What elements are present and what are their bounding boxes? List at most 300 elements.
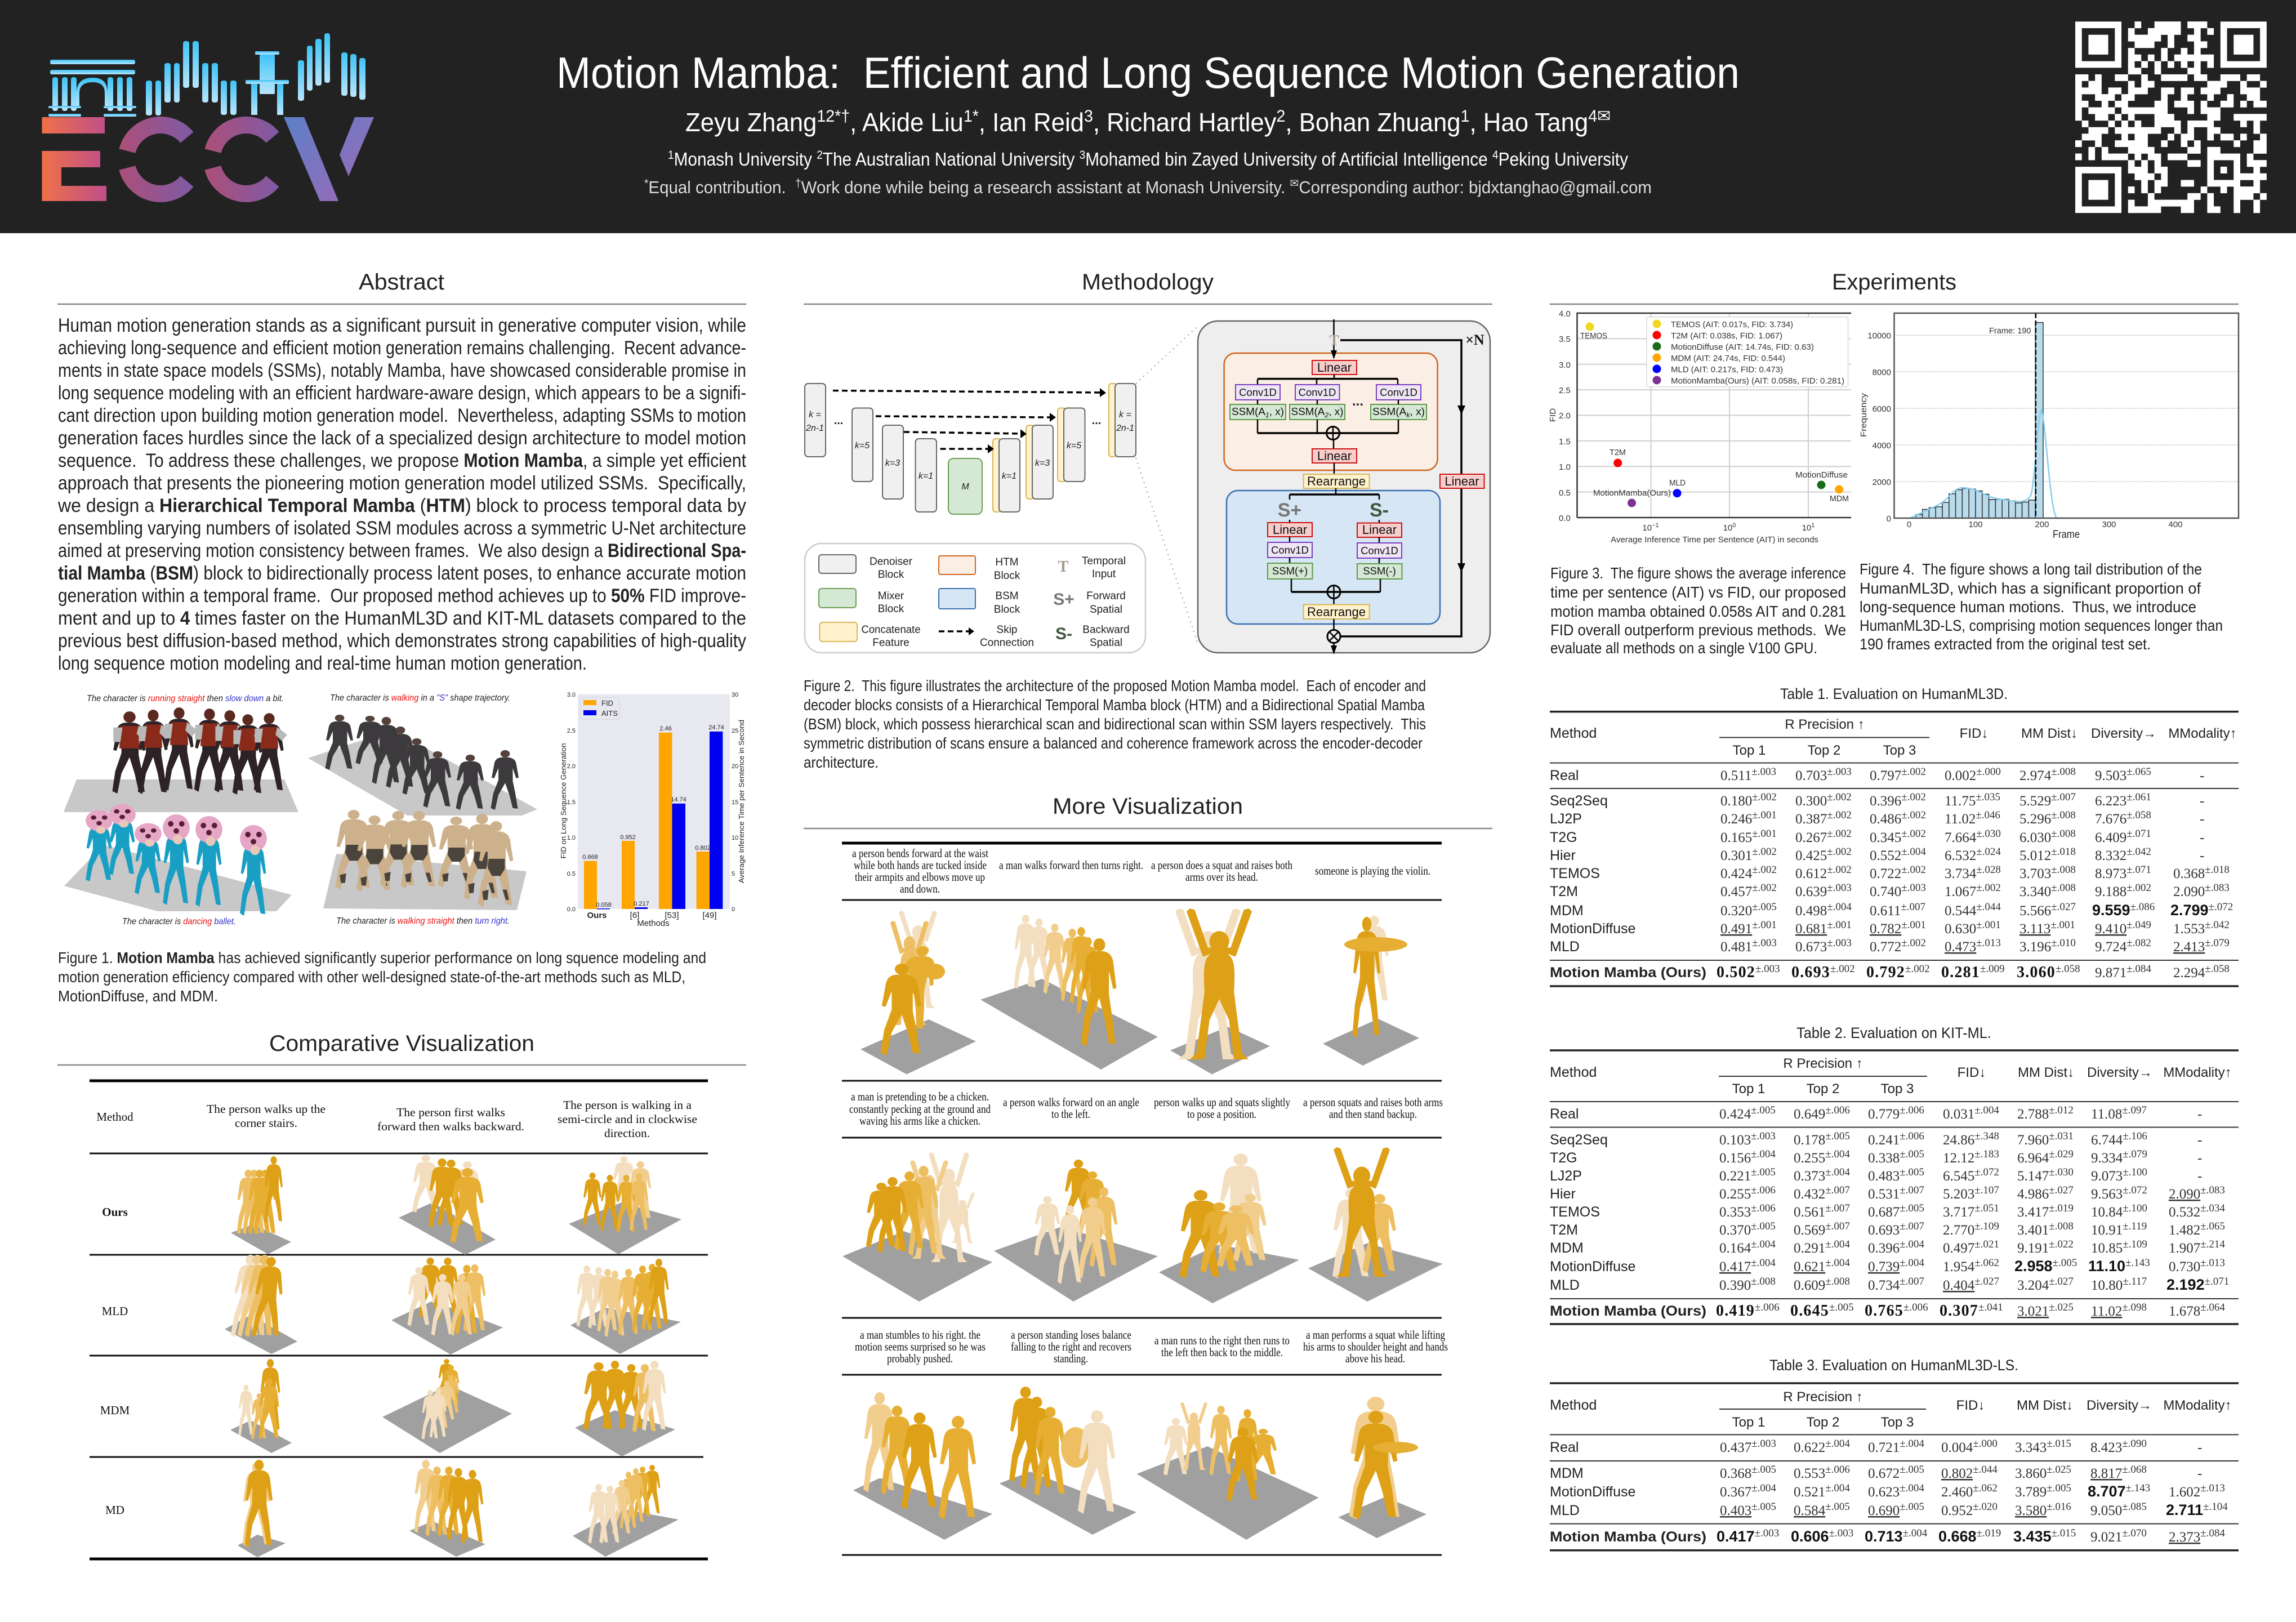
row: MDM: 0.611 <box>1870 903 1901 919</box>
row: Hier: 9.563 <box>2091 1187 2123 1202</box>
row: MLD: ±.104 <box>2203 1501 2228 1513</box>
y axis title left: FID on Long Sequence Generation <box>559 743 568 858</box>
row: Seq2Seq: Seq2Seq <box>1550 793 1608 809</box>
row: Motion Mamba (Ours): 0.417 <box>1717 1528 1755 1545</box>
figure 1 caption: Figure 1. Motion Mamba has achieved significantly superior performance on long squence modeling and <box>58 949 706 966</box>
row: MotionDiffuse: ±.049 <box>2126 919 2151 931</box>
row: LJ2P: ±.046 <box>1976 809 2000 821</box>
U-Net denoiser diagram: k=5 <box>1067 441 1081 451</box>
row: T2M: 3.340 <box>2019 884 2051 899</box>
abstract text: tial Mamba (BSM) block to bidirectionally process latent poses, to enhance accurate motion <box>58 563 746 584</box>
row: MLD: 0.609 <box>1794 1278 1825 1293</box>
panel: more visualization <box>804 794 1492 1555</box>
legend panel <box>805 543 1145 653</box>
row: LJ2P: ±.058 <box>2126 809 2151 821</box>
row: Real: 0.703 <box>1795 768 1827 783</box>
row: Real: 11.08 <box>2091 1107 2122 1122</box>
legend panel: HTM <box>995 556 1019 568</box>
row: Motion Mamba (Ours): ±.006 <box>1903 1302 1928 1313</box>
row: Hier: 0.432 <box>1794 1187 1825 1202</box>
row: TEMOS: 0.561 <box>1794 1205 1825 1220</box>
row: MotionDiffuse <box>1550 1257 2225 1275</box>
row: T2M: 0.740 <box>1870 884 1901 899</box>
row: Real: ±.065 <box>2126 766 2151 778</box>
point labels: MLD <box>1669 478 1686 488</box>
prompts row 1: a man walks forward then turns right. <box>999 858 1143 872</box>
figure 1 caption <box>58 949 706 1005</box>
footnotes: † <box>795 177 801 190</box>
row: MLD <box>1550 1276 2229 1293</box>
affiliations: Mohamed bin Zayed University of Artificial Intelligence <box>1085 149 1492 170</box>
table 2 header: Top 3 <box>1881 1081 1914 1097</box>
y ticks: 10000 <box>1867 331 1891 341</box>
row: T2G: 9.334 <box>2091 1151 2123 1166</box>
U-Net denoiser diagram: k=3 <box>1035 458 1050 468</box>
table 3 header: Top 3 <box>1881 1415 1914 1430</box>
row: Real: ±.097 <box>2122 1104 2147 1116</box>
prompts row 2: to pose a position. <box>1187 1107 1256 1121</box>
row: Real: 0.002 <box>1945 768 1976 783</box>
row: T2G: - <box>2200 830 2204 845</box>
legend panel: BSM <box>995 590 1019 602</box>
row labels: Ours <box>102 1205 128 1219</box>
figure 2 caption: architecture. <box>804 754 879 771</box>
table 2 header: MM Dist↓ <box>2018 1065 2074 1080</box>
row: MLD: 0.952 <box>1941 1503 1973 1518</box>
row: Motion Mamba (Ours): ±.005 <box>1829 1302 1854 1313</box>
row: MDM: ±.006 <box>1825 1464 1850 1476</box>
figure 3: scatter plot <box>1548 309 1851 545</box>
row: MDM: 0.553 <box>1794 1466 1825 1481</box>
row: Motion Mamba (Ours): Motion Mamba (Ours) <box>1550 1303 1706 1319</box>
row: Motion Mamba (Ours): ±.015 <box>2052 1527 2076 1539</box>
row: MDM <box>1550 1238 2225 1256</box>
skip connection arrows <box>833 388 1106 453</box>
scatter legend: MotionDiffuse (AIT: 14.74s, FID: 0.63) <box>1671 342 1814 352</box>
row: MDM: ±.004 <box>1827 901 1852 913</box>
row: Motion Mamba (Ours): 2.373 <box>2169 1530 2200 1545</box>
row: Seq2Seq: 0.180 <box>1720 794 1752 809</box>
U-Net denoiser diagram: ... <box>834 415 843 427</box>
panel: comparative visualization <box>57 1031 746 1559</box>
authors: , Ian Reid <box>979 108 1084 137</box>
row: T2G: ±.004 <box>1751 1148 1776 1160</box>
row: Real <box>1550 1104 2202 1122</box>
row: Motion Mamba (Ours): ±.006 <box>1755 1302 1780 1313</box>
figure 2 caption: Figure 2. This figure illustrates the architecture of the proposed Motion Mamba model. Each of encoder and <box>804 677 1426 694</box>
row: Seq2Seq: Seq2Seq <box>1550 1132 1608 1148</box>
caption: turn right: The character is walking straight then turn right. <box>336 916 510 926</box>
column headers: The person walks up the <box>207 1102 326 1116</box>
affiliations: 3 <box>1080 149 1085 162</box>
row: Real: 0.511 <box>1720 768 1751 783</box>
row: Hier: ±.107 <box>1974 1184 1999 1196</box>
row: MLD: ±.008 <box>1751 1276 1776 1287</box>
right axis ticks: 15 <box>732 799 738 806</box>
row: MLD: ±.020 <box>1973 1501 1998 1513</box>
U-Net denoiser diagram: 2n-1 <box>805 424 824 433</box>
affiliations: The Australian National University <box>823 149 1080 170</box>
row: Seq2Seq: 7.960 <box>2017 1133 2049 1148</box>
footnotes: ✉ <box>1290 177 1299 190</box>
table 3 header: Diversity→ <box>2087 1398 2152 1413</box>
prompts row 1: their armpits and elbows move up <box>855 870 985 884</box>
row: MDM: ±.044 <box>1973 1464 1998 1476</box>
row: Motion Mamba (Ours): ±.098 <box>2122 1302 2147 1313</box>
prompts row 1: a person does a squat and raises both <box>1151 858 1292 872</box>
y ticks: 1.0 <box>1559 462 1571 472</box>
table 1 header: MModality↑ <box>2168 726 2237 741</box>
row labels: MLD <box>102 1304 128 1318</box>
value labels: 0.668 <box>582 854 598 861</box>
U-Net denoiser diagram: k=1 <box>1002 471 1017 481</box>
header band <box>0 0 2296 233</box>
row: T2M: 1.067 <box>1945 884 1976 899</box>
table 2 header: Top 1 <box>1732 1081 1765 1097</box>
abstract text: cant direction upon building motion generation model. Nevertheless, adapting SSMs to motion <box>58 405 746 426</box>
row: Real: 9.503 <box>2095 768 2126 783</box>
prompts row 1 <box>852 846 1430 895</box>
row: Hier: 0.425 <box>1795 848 1827 863</box>
abstract text: previous best diffusion-based method, which demonstrates strong capabilities of high-quality <box>58 630 746 652</box>
row: Seq2Seq: - <box>2197 1133 2202 1148</box>
y ticks: 0.5 <box>1559 488 1571 498</box>
row: TEMOS: ±.100 <box>2123 1202 2147 1214</box>
HTM block: Conv1D <box>1239 386 1277 398</box>
y ticks <box>1559 309 1571 523</box>
row: Real: 0.437 <box>1720 1440 1751 1455</box>
row: MLD: ±.085 <box>2122 1501 2147 1513</box>
row: T2G: 0.255 <box>1794 1151 1825 1166</box>
row: Real: ±.006 <box>1825 1104 1850 1116</box>
prompts row 3 <box>855 1328 1448 1365</box>
abstract text: ment and up to 4 times faster on the HumanML3D and KIT-ML datasets compared to the <box>58 608 746 629</box>
row: Seq2Seq: ±.002 <box>1827 791 1852 803</box>
row: Seq2Seq: ±.106 <box>2123 1130 2147 1142</box>
row: Seq2Seq: ±.007 <box>2051 791 2076 803</box>
row: Hier: ±.027 <box>2049 1184 2074 1196</box>
x ticks: 400 <box>2168 520 2183 529</box>
row: Seq2Seq: ±.031 <box>2049 1130 2074 1142</box>
authors: Zeyu Zhang <box>685 108 823 137</box>
row: Seq2Seq: 6.223 <box>2095 794 2126 809</box>
row: MDM: 0.672 <box>1868 1466 1900 1481</box>
row: Hier: 5.012 <box>2019 848 2051 863</box>
panel: methodology <box>804 270 1492 771</box>
row: MotionDiffuse <box>1550 1482 2225 1500</box>
KDE curve <box>1910 409 2236 518</box>
row: MotionDiffuse: 11.10 <box>2088 1258 2125 1275</box>
row: MotionDiffuse: 0.739 <box>1868 1259 1900 1275</box>
value labels <box>582 724 724 908</box>
U-Net denoiser diagram <box>805 384 1136 514</box>
row: LJ2P: 9.073 <box>2091 1169 2123 1184</box>
figure 1: character renders <box>64 693 537 926</box>
row: Motion Mamba (Ours): 0.713 <box>1865 1528 1903 1545</box>
row: T2G: ±.079 <box>2123 1148 2147 1160</box>
row: Motion Mamba (Ours): Motion Mamba (Ours) <box>1550 1529 1706 1545</box>
legend panel: Denoiser <box>870 556 913 568</box>
row: LJ2P: ±.002 <box>1827 809 1852 821</box>
prompts row 1: arms over its head. <box>1185 870 1258 884</box>
row: MLD: 0.690 <box>1868 1503 1900 1518</box>
row: T2M: 0.639 <box>1795 884 1827 899</box>
row: T2G: ±.002 <box>1827 828 1852 840</box>
logo: ECCV letters <box>42 117 374 201</box>
table 2 header: R Precision ↑ <box>1783 1056 1863 1071</box>
row: MotionDiffuse: ±.143 <box>2126 1482 2150 1494</box>
prompts row 3: a person standing loses balance <box>1011 1328 1131 1342</box>
row: LJ2P: 0.373 <box>1794 1169 1825 1184</box>
row: MotionDiffuse: ±.004 <box>1825 1257 1850 1269</box>
row: T2M: ±.003 <box>1901 882 1926 894</box>
row: Real: ±.000 <box>1976 766 2001 778</box>
row: Real: ±.012 <box>2049 1104 2074 1116</box>
row: Motion Mamba (Ours): 0.792 <box>1866 964 1905 981</box>
row: TEMOS: ±.002 <box>1901 864 1926 876</box>
prompts row 1: a person bends forward at the waist <box>852 846 988 860</box>
row: Seq2Seq: ±.003 <box>1751 1130 1776 1142</box>
main flow lines <box>1327 319 1465 654</box>
row: Hier: ±.072 <box>2123 1184 2147 1196</box>
row: MDM: 8.817 <box>2090 1466 2122 1481</box>
chart legend: AITS <box>601 709 618 718</box>
row: MotionDiffuse: ±.004 <box>1900 1257 1924 1269</box>
legend panel: Spatial <box>1090 637 1122 649</box>
row: Motion Mamba (Ours): 0.502 <box>1717 964 1755 981</box>
row: MLD: 0.673 <box>1795 939 1827 955</box>
row: Real: ±.015 <box>2047 1438 2071 1450</box>
row: Seq2Seq: 0.396 <box>1870 794 1901 809</box>
row: T2G <box>1550 1148 2202 1166</box>
row: MLD renders <box>225 1255 681 1354</box>
row: Hier: ±.018 <box>2051 846 2076 858</box>
row: TEMOS: 0.612 <box>1795 866 1827 881</box>
row: T2M: ±.002 <box>1976 882 2001 894</box>
BSM block: S+ <box>1278 500 1301 521</box>
left axis ticks: 1.5 <box>567 799 576 806</box>
row: MLD: ±.013 <box>1976 937 2001 949</box>
legend panel: Skip <box>997 624 1017 636</box>
x axis title: Frame <box>2053 529 2080 541</box>
row: TEMOS: 10.84 <box>2091 1205 2123 1220</box>
row: TEMOS: ±.005 <box>1900 1202 1924 1214</box>
row: MLD: 0.772 <box>1870 939 1901 955</box>
BSM block: Conv1D <box>1271 544 1309 556</box>
row: Motion Mamba (Ours): 0.693 <box>1791 964 1830 981</box>
HTM block: SSM(A <box>1291 406 1324 417</box>
figure 3 caption: FID overall outperform previous methods. We <box>1550 621 1846 639</box>
prompts row 1: while both hands are tucked inside <box>854 858 987 872</box>
legend panel: Mixer <box>878 590 904 602</box>
authors: 3 <box>1084 107 1093 126</box>
row: TEMOS: ±.008 <box>2051 864 2076 876</box>
row: MotionDiffuse: 0.621 <box>1794 1259 1825 1275</box>
scatter legend <box>1647 317 1848 387</box>
category labels: [49] <box>702 911 717 920</box>
row: Motion Mamba (Ours): 0.765 <box>1865 1302 1903 1320</box>
table 1 header <box>1550 717 2237 758</box>
row: LJ2P: ±.004 <box>1825 1166 1850 1178</box>
row: MotionDiffuse: 0.681 <box>1795 921 1827 937</box>
row: Motion Mamba (Ours): ±.058 <box>2056 963 2080 975</box>
row: Real: ±.004 <box>1825 1438 1850 1450</box>
prompts row 3: the left then back to the middle. <box>1161 1345 1283 1359</box>
row: T2G: T2G <box>1550 1150 1577 1166</box>
figure 3 caption <box>1550 564 1846 657</box>
legend panel: Connection <box>980 637 1034 649</box>
row: T2M: 10.91 <box>2091 1223 2123 1238</box>
x ticks: 10 <box>1642 523 1652 533</box>
row: Hier: ±.002 <box>1752 846 1777 858</box>
top rearrange: Rearrange <box>1307 474 1366 488</box>
row labels: MDM <box>100 1403 130 1417</box>
row: Real <box>1550 1438 2202 1455</box>
affiliations: Monash University <box>674 149 817 170</box>
row: MotionDiffuse: ±.001 <box>1901 919 1926 931</box>
column headers: The person is walking in a <box>563 1098 692 1112</box>
affiliations: Peking University <box>1499 149 1628 170</box>
row: LJ2P: 6.545 <box>1943 1169 1974 1184</box>
row: Motion Mamba (Ours): 3.021 <box>2017 1304 2049 1319</box>
table 1 header: Top 3 <box>1883 743 1916 758</box>
row: Real: 0.004 <box>1941 1440 1973 1455</box>
row: Seq2Seq: 0.241 <box>1868 1133 1900 1148</box>
row: MotionDiffuse: 0.630 <box>1945 921 1976 937</box>
row: T2M: 0.569 <box>1794 1223 1825 1238</box>
row: MDM <box>1550 1464 2202 1481</box>
table 3 header: Method <box>1550 1397 1597 1413</box>
row: Real <box>1550 766 2204 783</box>
U-Net denoiser diagram: ... <box>1092 415 1101 427</box>
QR code <box>2075 25 2267 210</box>
row: Seq2Seq: 0.103 <box>1719 1133 1751 1148</box>
row: Hier: ±.004 <box>1901 846 1926 858</box>
left axis ticks: 3.0 <box>567 692 576 698</box>
row: MDM: ±.068 <box>2122 1464 2147 1476</box>
value labels: 0.952 <box>620 834 636 841</box>
row: MLD: 3.204 <box>2017 1278 2049 1293</box>
table 2 header: FID↓ <box>1958 1065 1986 1080</box>
row: Real: - <box>2200 768 2204 783</box>
row: Hier: ±.024 <box>1976 846 2001 858</box>
row: LJ2P <box>1550 809 2204 827</box>
row: Hier: - <box>2200 848 2204 863</box>
row: MDM: MDM <box>1550 903 1584 919</box>
row: Real: 8.423 <box>2090 1440 2122 1455</box>
figure 4 caption: Figure 4. The figure shows a long tail distribution of the <box>1860 560 2202 578</box>
row: Motion Mamba (Ours) <box>1550 963 2230 981</box>
row: Real: ±.006 <box>1900 1104 1924 1116</box>
HTM block: , x) <box>1328 406 1344 417</box>
value labels: 24.74 <box>708 724 724 731</box>
row: T2G: 0.165 <box>1720 830 1752 845</box>
row: Real: - <box>2197 1440 2202 1455</box>
render: beige robot <box>336 810 513 907</box>
row: MotionDiffuse: MotionDiffuse <box>1550 1259 1635 1275</box>
x ticks: 0 <box>1732 522 1736 529</box>
authors: , Bohan Zhuang <box>1285 108 1461 137</box>
row: MLD: 3.580 <box>2015 1503 2047 1518</box>
heading: Abstract: Abstract <box>359 270 444 295</box>
x ticks: 200 <box>2035 520 2049 529</box>
row: Motion Mamba (Ours): 0.645 <box>1790 1302 1829 1320</box>
figure 4 caption: long-sequence human motions. Thus, we introduce <box>1860 598 2196 616</box>
y ticks: 6000 <box>1873 404 1891 414</box>
row: Motion Mamba (Ours): ±.025 <box>2049 1302 2074 1313</box>
y axis title: Frequency <box>1859 393 1869 437</box>
figure 4 caption <box>1860 560 2223 653</box>
row: Motion Mamba (Ours): ±.064 <box>2200 1302 2225 1313</box>
prompts row 1: someone is playing the violin. <box>1315 864 1430 877</box>
row: T2G: 0.156 <box>1719 1151 1751 1166</box>
render: floors <box>64 730 537 911</box>
row: LJ2P: 0.387 <box>1795 812 1827 827</box>
authors: , Hao Tang <box>1470 108 1588 137</box>
scatter legend: MotionMamba(Ours) (AIT: 0.058s, FID: 0.281) <box>1671 376 1844 386</box>
row: Motion Mamba (Ours): ±.002 <box>1830 963 1855 975</box>
row: Real: ±.005 <box>1751 1104 1776 1116</box>
row: LJ2P: 0.486 <box>1870 812 1901 827</box>
row: LJ2P: 0.246 <box>1720 812 1752 827</box>
row: LJ2P: ±.072 <box>1974 1166 1999 1178</box>
row: T2M: ±.003 <box>1827 882 1852 894</box>
row: Seq2Seq: ±.002 <box>1901 791 1926 803</box>
row: Seq2Seq: 6.744 <box>2091 1133 2123 1148</box>
prompts row 1: and down. <box>900 882 940 895</box>
renders row 2 <box>842 1147 1443 1303</box>
right axis ticks: 30 <box>732 692 738 698</box>
row: T2G: 12.12 <box>1943 1151 1974 1166</box>
row: MLD: 0.584 <box>1794 1503 1826 1518</box>
row: Motion Mamba (Ours): ±.009 <box>1980 963 2005 975</box>
row: Real: Real <box>1550 1440 1579 1455</box>
row: MLD: 0.390 <box>1719 1278 1751 1293</box>
value labels: 2.46 <box>659 725 672 732</box>
heading: More Visualization: More Visualization <box>1053 794 1243 819</box>
row: MLD: 0.734 <box>1868 1278 1900 1293</box>
HTM block: SSM(A <box>1372 406 1406 417</box>
row: TEMOS: ±.071 <box>2126 864 2151 876</box>
authors: 2 <box>1277 107 1285 126</box>
row: T2M: 0.370 <box>1719 1223 1751 1238</box>
row: Real: 0.779 <box>1868 1107 1900 1122</box>
row: T2M: ±.008 <box>2051 882 2076 894</box>
table 2 <box>1550 1024 2239 1324</box>
row: TEMOS: 0.532 <box>2169 1205 2200 1220</box>
row: TEMOS: 0.687 <box>1868 1205 1900 1220</box>
table 1 header: R Precision ↑ <box>1785 717 1865 732</box>
row: Motion Mamba (Ours): 0.281 <box>1941 964 1980 981</box>
point labels: TEMOS <box>1580 331 1607 341</box>
row: MotionDiffuse: ±.013 <box>2200 1257 2225 1269</box>
row: Motion Mamba (Ours): 0.668 <box>1938 1528 1977 1545</box>
figure 2 caption: decoder blocks consists of a Hierarchical Temporal Mamba block (HTM) and a Bidirectional Spatial Mamba <box>804 696 1425 714</box>
table 1 header: Top 2 <box>1808 743 1840 758</box>
row: MDM: 0.396 <box>1868 1241 1900 1256</box>
row labels <box>100 1205 130 1517</box>
HTM block: Conv1D <box>1380 386 1417 398</box>
table 1 header: Top 1 <box>1733 743 1766 758</box>
caption: running straight: The character is running straight then slow down a bit. <box>87 694 284 703</box>
table 3 header: FID↓ <box>1956 1398 1985 1413</box>
row: Hier: 0.255 <box>1719 1187 1751 1202</box>
row: Hier: 2.090 <box>2169 1187 2200 1202</box>
table 1 caption: Table 1. Evaluation on HumanML3D. <box>1780 685 2008 702</box>
row: MDM: 0.368 <box>1720 1466 1751 1481</box>
row: Seq2Seq: ±.005 <box>1825 1130 1850 1142</box>
row: TEMOS: ±.002 <box>1752 864 1777 876</box>
